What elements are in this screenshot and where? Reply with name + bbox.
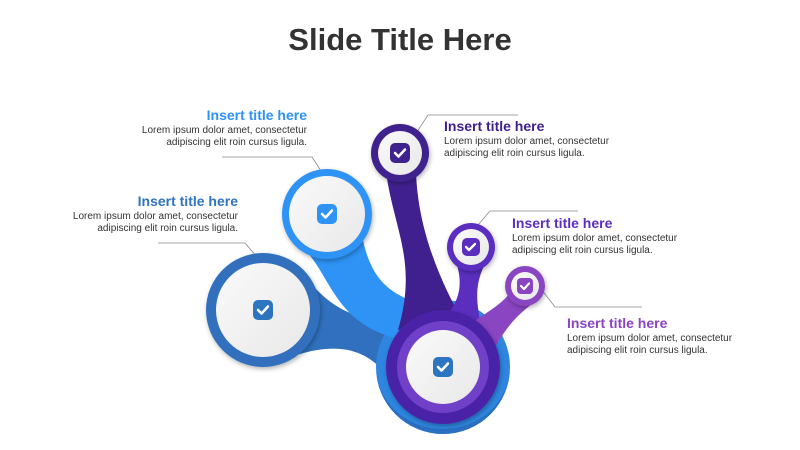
connector: mid purple — [432, 262, 486, 332]
text block 2: Lorem ipsum dolor amet, consectetur — [73, 211, 238, 222]
node: top purple — [371, 124, 429, 182]
hub outer ring — [376, 300, 510, 434]
text block 3: adipiscing elit roin cursus ligula. — [444, 148, 585, 159]
text block 1: adipiscing elit roin cursus ligula. — [166, 137, 307, 148]
connector: mid blue — [305, 235, 445, 338]
text block 4: Insert title here — [512, 215, 612, 231]
text block 3 — [444, 118, 609, 159]
node: small violet — [505, 266, 545, 306]
hub — [386, 310, 500, 424]
node: mid blue — [282, 169, 372, 259]
text block 1: Lorem ipsum dolor amet, consectetur — [142, 125, 307, 136]
node: big left — [206, 253, 320, 367]
text block 1: Insert title here — [207, 107, 307, 123]
leader lines — [158, 115, 642, 307]
text block 5: Insert title here — [567, 315, 667, 331]
text block 2: adipiscing elit roin cursus ligula. — [97, 223, 238, 234]
text block 4 — [512, 215, 677, 256]
text block 2: Insert title here — [138, 193, 238, 209]
text block 3: Insert title here — [444, 118, 544, 134]
text block 5: Lorem ipsum dolor amet, consectetur — [567, 333, 732, 344]
text block 1 — [142, 107, 307, 148]
connector: left blue — [268, 260, 398, 392]
node: mid purple — [447, 223, 495, 271]
text block 4: Lorem ipsum dolor amet, consectetur — [512, 233, 677, 244]
text block 5: adipiscing elit roin cursus ligula. — [567, 345, 708, 356]
text block 3: Lorem ipsum dolor amet, consectetur — [444, 136, 609, 147]
title: Slide Title Here — [288, 22, 512, 57]
text block 5 — [567, 315, 732, 356]
connector: violet — [462, 290, 538, 352]
text block 2 — [73, 193, 238, 234]
text block 4: adipiscing elit roin cursus ligula. — [512, 245, 653, 256]
connector: top purple stem — [386, 172, 462, 330]
